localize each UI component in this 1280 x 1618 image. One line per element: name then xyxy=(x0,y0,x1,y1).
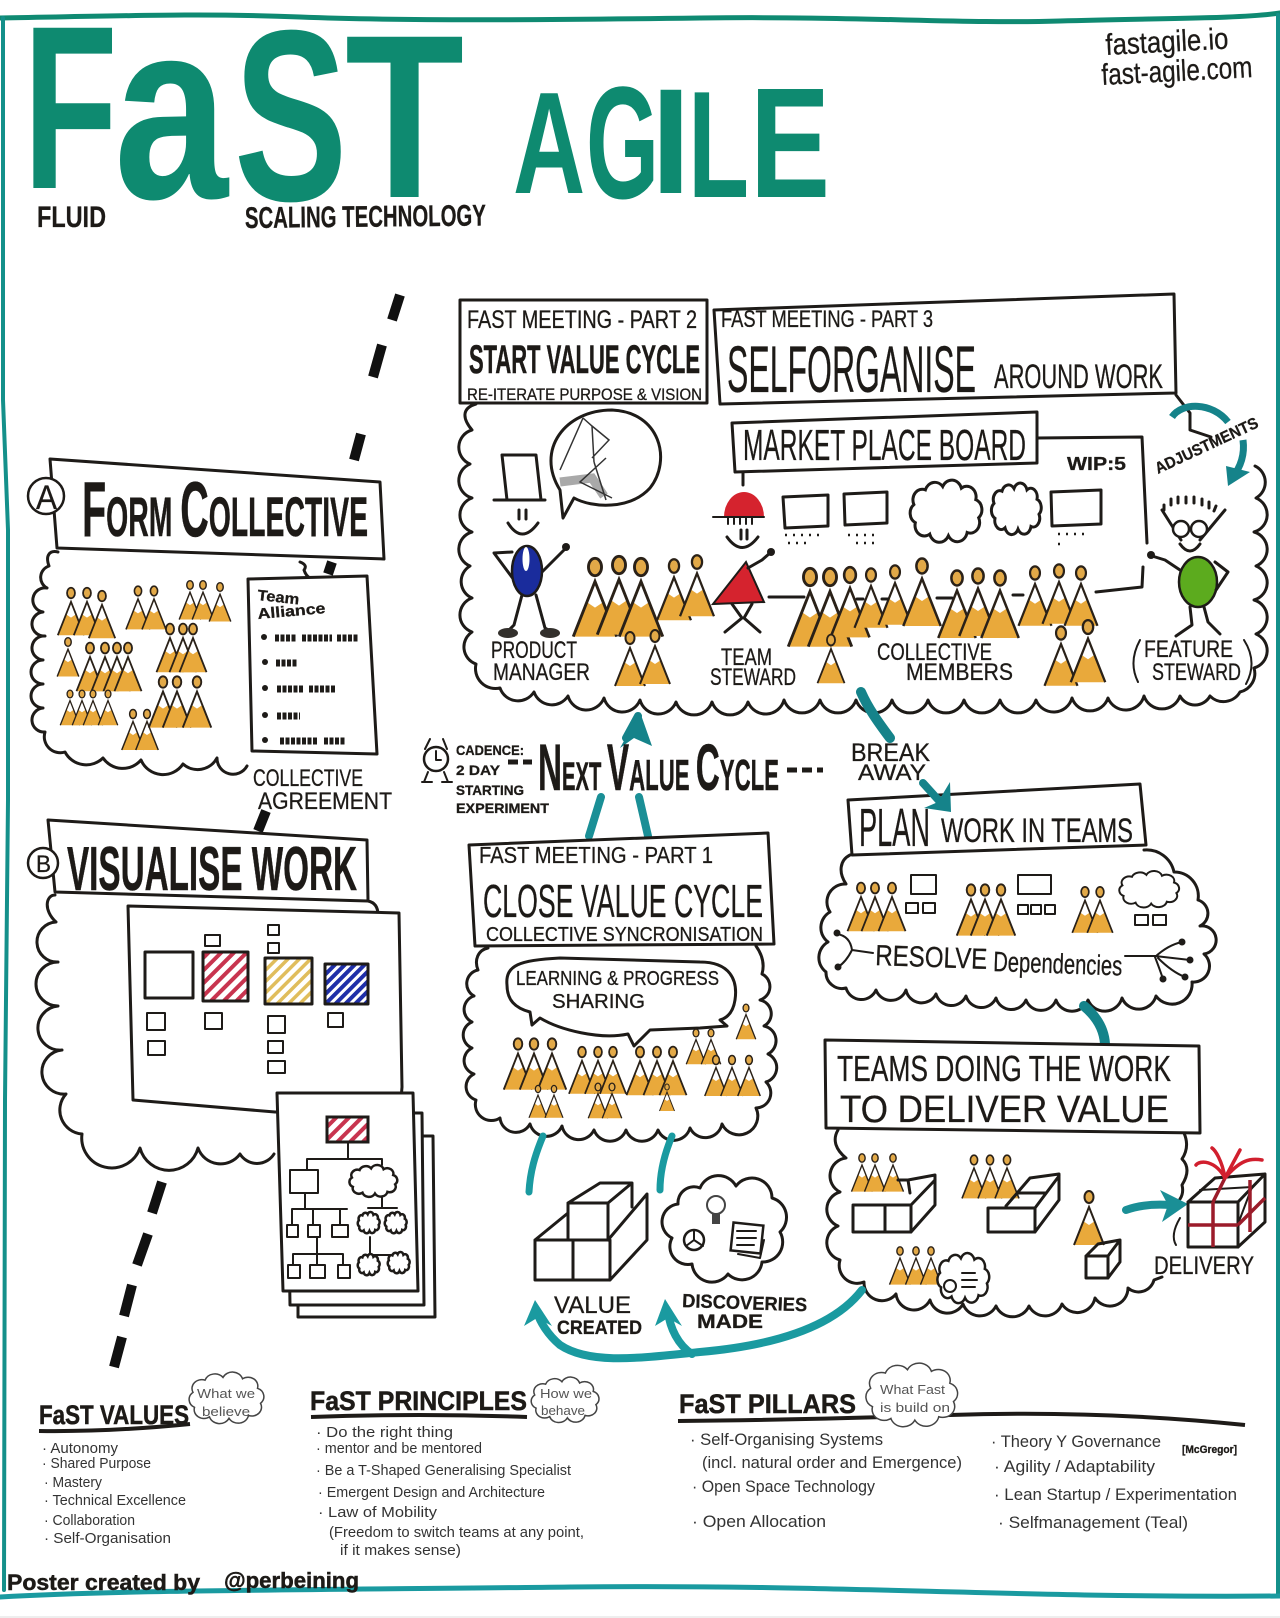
heading box close xyxy=(469,833,774,946)
resolve dependencies: Dependencies xyxy=(993,946,1123,981)
title: AGILE: L xyxy=(688,61,749,230)
title: AGILE: G xyxy=(586,53,659,232)
principles list: · Do the right thing xyxy=(316,1424,453,1441)
principles list: · Law of Mobility xyxy=(318,1504,438,1521)
heading box A xyxy=(50,459,384,559)
how we behave cloud: How we xyxy=(540,1386,592,1401)
role labels xyxy=(491,636,1252,691)
arrows: outputs into close value cycle xyxy=(529,1136,672,1192)
role labels: TEAM xyxy=(721,644,772,671)
cadence clock and text: CADENCE: xyxy=(456,742,524,758)
delivery arrow xyxy=(1126,1190,1188,1222)
collective people xyxy=(57,581,231,750)
cloud outline close xyxy=(463,946,777,1141)
heading box close: FAST MEETING - PART 1 xyxy=(479,842,713,868)
title: AGILE: E xyxy=(750,55,830,231)
break away label: AWAY xyxy=(858,760,926,785)
heading box teams: TEAMS DOING THE WORK xyxy=(837,1048,1171,1089)
badge A: A xyxy=(36,479,57,517)
pillars list left: · Open Allocation xyxy=(692,1512,826,1531)
heading box: part 3: SELFORGANISE xyxy=(727,332,976,406)
pillars list right: [McGregor] xyxy=(1182,1444,1237,1456)
heading box close: CLOSE VALUE CYCLE xyxy=(483,875,763,927)
value created label: CREATED xyxy=(557,1318,642,1339)
pillars list right: · Agility / Adaptability xyxy=(994,1457,1156,1476)
values list: · Mastery xyxy=(44,1474,102,1491)
poster credit xyxy=(7,1568,359,1595)
team with discovery cloud xyxy=(890,1247,989,1303)
values list: · Technical Excellence xyxy=(44,1492,186,1509)
cloud outline plan xyxy=(819,850,1216,1011)
collective agreement label: AGREEMENT xyxy=(258,788,392,815)
what we believe cloud: believe xyxy=(202,1404,250,1419)
heading box plan: WORK IN TEAMS xyxy=(941,812,1133,850)
collective agreement label: COLLECTIVE xyxy=(253,765,363,792)
panel: form collective xyxy=(28,459,392,815)
values list: · Collaboration xyxy=(44,1512,135,1529)
heading box: part 2: FAST MEETING - PART 2 xyxy=(467,306,697,334)
title: AGILE: A xyxy=(513,63,585,224)
role labels: PRODUCT xyxy=(491,637,577,664)
marketplace board: MARKET PLACE BOARD xyxy=(743,421,1026,470)
icon: discoveries cloud xyxy=(662,1176,787,1282)
learning speech bubble: SHARING xyxy=(552,991,645,1013)
next value cycle label: NEXT VALUE CYCLE xyxy=(538,730,779,804)
discoveries label: DISCOVERIES xyxy=(682,1291,807,1316)
arrow: break away xyxy=(861,692,951,812)
principles list: · Be a T-Shaped Generalising Specialist xyxy=(316,1462,572,1479)
poster credit: Poster created by xyxy=(7,1570,201,1595)
icon: value created cubes xyxy=(535,1183,647,1280)
pillars list left: (incl. natural order and Emergence) xyxy=(702,1453,962,1472)
what we believe cloud xyxy=(189,1372,264,1424)
adjustments arrows and label: ADJUSTMENTS xyxy=(1153,415,1261,478)
marketplace board: WIP:5 xyxy=(1067,454,1126,474)
pillars heading: FaST PILLARS xyxy=(679,1389,856,1419)
how we behave cloud: behave xyxy=(541,1403,585,1418)
cadence clock and text: EXPERIMENT xyxy=(456,800,549,816)
panel: fast pillars xyxy=(678,1363,1245,1532)
team alliance sheet: Alliance xyxy=(257,600,326,623)
heading box teams xyxy=(825,1040,1200,1133)
collective member groups xyxy=(573,555,1143,686)
website links xyxy=(1101,23,1253,92)
principles list: · Emergent Design and Architecture xyxy=(318,1484,545,1501)
title: FaST xyxy=(23,0,464,253)
panel: close value cycle xyxy=(463,833,777,1141)
discoveries label: MADE xyxy=(697,1312,763,1333)
how we behave cloud xyxy=(531,1377,599,1423)
sharing people xyxy=(504,1004,760,1118)
panel: selforganise cloud xyxy=(459,294,1267,715)
collective agreement label xyxy=(253,765,392,815)
panel: teams doing the work xyxy=(825,1040,1265,1317)
badge A xyxy=(28,478,64,517)
arrows: close cycle to next value cycle xyxy=(589,797,648,836)
dashed timeline xyxy=(114,295,400,1367)
cloud outline A xyxy=(31,552,310,775)
poster credit: @perbeining xyxy=(224,1568,359,1593)
cadence clock and text xyxy=(422,739,549,816)
what fast is built on cloud: is build on xyxy=(880,1400,950,1415)
website links: fastagile.io xyxy=(1105,23,1229,62)
what fast is built on cloud: What Fast xyxy=(880,1382,945,1397)
kanban board xyxy=(128,906,402,1112)
what we believe cloud: What we xyxy=(197,1386,255,1401)
values list xyxy=(42,1440,186,1547)
heading box: part 2: START VALUE CYCLE xyxy=(469,338,700,382)
pillars list right: · Theory Y Governance xyxy=(991,1432,1161,1451)
badge B xyxy=(28,848,58,878)
role labels: STEWARD xyxy=(710,664,796,691)
pillars list right xyxy=(991,1432,1237,1532)
badge B: B xyxy=(36,851,51,878)
pillars list left: · Open Space Technology xyxy=(692,1477,875,1496)
principles list: · mentor and be mentored xyxy=(316,1440,482,1457)
marketplace board xyxy=(732,412,1147,544)
subtitle: fluid: FLUID xyxy=(37,201,106,234)
panel: fast principles xyxy=(310,1377,599,1559)
delivery label: DELIVERY xyxy=(1154,1252,1254,1280)
arrow: teams back to value and discoveries xyxy=(524,1290,862,1358)
value created label: VALUE xyxy=(554,1292,631,1319)
resolve dependencies xyxy=(834,930,1194,982)
what fast is built on cloud xyxy=(866,1363,958,1427)
heading box plan: PLAN xyxy=(859,798,930,858)
learning speech bubble xyxy=(507,958,736,1046)
product manager figure xyxy=(494,455,570,638)
feature steward figure xyxy=(1147,497,1228,636)
break away label: BREAK xyxy=(851,739,930,767)
team alliance sheet: Team xyxy=(257,587,300,608)
connector: plan to teams xyxy=(1084,1006,1105,1044)
pillars list right: · Selfmanagement (Teal) xyxy=(998,1513,1188,1532)
heading box close: COLLECTIVE SYNCRONISATION xyxy=(486,924,763,946)
heading box: part 3: AROUND WORK xyxy=(994,358,1163,396)
learning speech bubble: LEARNING & PROGRESS xyxy=(516,968,719,990)
panel: plan work in teams xyxy=(819,784,1216,1011)
team steward figure xyxy=(713,492,775,632)
heading box: part 3: FAST MEETING - PART 3 xyxy=(721,306,933,333)
single worker with block xyxy=(1074,1191,1120,1278)
cloud outline B xyxy=(36,895,378,1170)
arrow: back to start value cycle xyxy=(620,712,652,748)
heading box A: FORM COLLECTIVE xyxy=(82,465,368,553)
gift box xyxy=(1188,1148,1265,1247)
heading box: part 2 xyxy=(460,300,707,404)
heading box B xyxy=(48,820,368,904)
role labels: COLLECTIVE xyxy=(877,639,992,666)
value created label xyxy=(554,1292,642,1339)
cloud outline xyxy=(459,395,1267,715)
values list: · Shared Purpose xyxy=(42,1455,151,1472)
principles heading: FaST PRINCIPLES xyxy=(310,1386,527,1416)
principles list xyxy=(316,1424,584,1559)
heading box teams: TO DELIVER VALUE xyxy=(840,1089,1169,1131)
planning teams and cards xyxy=(848,871,1179,936)
heading box: part 2: RE-ITERATE PURPOSE & VISION xyxy=(467,385,702,404)
team with blocks 2 xyxy=(962,1155,1059,1232)
cadence clock and text: STARTING xyxy=(456,782,524,798)
title: AGILE: I xyxy=(651,58,691,226)
break away label xyxy=(851,739,930,785)
heading box: part 3 xyxy=(714,294,1176,406)
cadence clock and text: 2 DAY xyxy=(456,762,501,778)
principles list: (Freedom to switch teams at any point, xyxy=(329,1524,584,1541)
organisation chart stack xyxy=(277,1093,435,1317)
heading box plan xyxy=(848,784,1146,858)
panel: visualise work xyxy=(28,820,435,1317)
values heading: FaST VALUES xyxy=(39,1400,189,1430)
role labels: STEWARD xyxy=(1152,659,1241,686)
role labels: MEMBERS xyxy=(906,659,1013,686)
values list: · Autonomy xyxy=(42,1440,118,1457)
resolve dependencies: RESOLVE xyxy=(875,940,988,976)
discoveries label xyxy=(682,1291,807,1333)
title: AGILE xyxy=(513,53,830,232)
pillars list left xyxy=(690,1430,962,1531)
heading box B: VISUALISE WORK xyxy=(67,835,357,904)
team with blocks 1 xyxy=(852,1154,935,1232)
principles list: if it makes sense) xyxy=(340,1542,461,1559)
role labels: FEATURE xyxy=(1144,636,1233,663)
role labels: MANAGER xyxy=(493,659,590,686)
team alliance sheet xyxy=(248,576,377,754)
panel: fast values xyxy=(39,1372,264,1547)
subtitle: scaling technology: SCALING TECHNOLOGY xyxy=(245,199,486,235)
values list: · Self-Organisation xyxy=(44,1530,171,1547)
speech bubble with roadmap sketch xyxy=(551,410,661,518)
pillars heading xyxy=(678,1389,1245,1425)
pillars list right: · Lean Startup / Experimentation xyxy=(994,1485,1237,1504)
cloud outline teams xyxy=(827,1130,1187,1317)
pillars list left: · Self-Organising Systems xyxy=(690,1430,883,1449)
